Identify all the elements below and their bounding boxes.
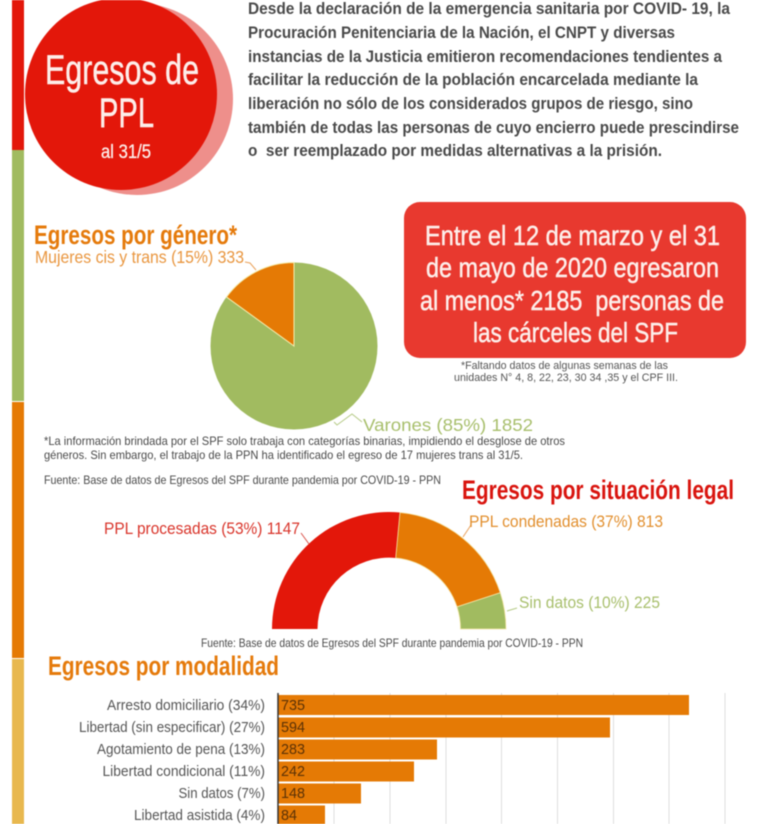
callout footnote: *Faltando datos de algunas semanas de las bbox=[461, 360, 668, 372]
bar chart: modalidad: Sin datos (7%) bbox=[178, 786, 265, 802]
bar chart: modalidad: 283 bbox=[281, 741, 305, 758]
bar chart: modalidad: 735 bbox=[281, 697, 305, 714]
intro paragraph: facilitar la reducción de la población encarcelada mediante la bbox=[248, 71, 699, 89]
semi-donut chart: situación legal: Sin datos (10%) 225 bbox=[519, 593, 660, 612]
left colour stripe bbox=[12, 0, 24, 824]
bar chart: modalidad bbox=[79, 693, 725, 824]
intro paragraph: instancias de la Justicia emitieron recomendaciones tendientes a bbox=[248, 48, 723, 66]
intro paragraph: o ser reemplazado por medidas alternativas a la prisión. bbox=[248, 142, 662, 160]
semi-donut chart: situación legal: PPL procesadas (53%) 1147 bbox=[104, 519, 300, 538]
gender footnote: géneros. Sin embargo, el trabajo de la PPN ha identificado el egreso de 17 mujeres trans al 31/5. bbox=[44, 448, 523, 462]
title badge: al 31/5 bbox=[101, 142, 151, 163]
callout: total de egresos bbox=[404, 202, 746, 358]
bar chart: modalidad: 84 bbox=[281, 807, 297, 824]
heading: egresos por género: Egresos por género* bbox=[34, 220, 237, 250]
bar chart: modalidad: Agotamiento de pena (13%) bbox=[97, 742, 265, 758]
title badge: PPL bbox=[99, 89, 154, 136]
gender footnote: *La información brindada por el SPF solo trabaja con categorías binarias, impidiendo el desglose de otros bbox=[44, 434, 565, 448]
intro paragraph: Procuración Penitenciaria de la Nación, el CNPT y diversas bbox=[248, 24, 675, 42]
callout: total de egresos: Entre el 12 de marzo y el 31 bbox=[425, 220, 720, 251]
bar chart: modalidad: 594 bbox=[281, 719, 305, 736]
callout footnote bbox=[454, 360, 678, 384]
pie chart: género: Varones (85%) 1852 bbox=[363, 415, 533, 435]
callout: total de egresos: las cárceles del SPF bbox=[473, 317, 678, 348]
bar chart: modalidad: Libertad condicional (11%) bbox=[102, 764, 265, 780]
intro paragraph bbox=[248, 0, 739, 160]
pie chart: género: Mujeres cis y trans (15%) 333 bbox=[35, 247, 244, 267]
title badge: Egresos de bbox=[45, 46, 199, 93]
title badge bbox=[25, 0, 233, 195]
bar chart: modalidad: Libertad (sin especificar) (27%) bbox=[79, 720, 265, 736]
bar chart: modalidad: Arresto domiciliario (34%) bbox=[107, 698, 265, 714]
heading: egresos por modalidad: Egresos por modalidad bbox=[48, 651, 279, 681]
intro paragraph: liberación no sólo de los considerados grupos de riesgo, sino bbox=[248, 95, 693, 113]
gender footnote bbox=[44, 434, 565, 487]
semi-donut chart: situación legal: PPL condenadas (37%) 813 bbox=[469, 512, 663, 531]
callout footnote: unidades N° 4, 8, 22, 23, 30 34 ,35 y el CPF III. bbox=[454, 372, 678, 384]
bar chart: modalidad: 148 bbox=[281, 785, 305, 802]
intro paragraph: Desde la declaración de la emergencia sanitaria por COVID- 19, la bbox=[248, 0, 731, 18]
semi-donut chart: situación legal bbox=[104, 512, 663, 629]
pie chart: género bbox=[35, 247, 533, 435]
bar chart: modalidad: 242 bbox=[281, 763, 305, 780]
bar chart: modalidad: Libertad asistida (4%) bbox=[134, 808, 265, 824]
gender footnote: Fuente: Base de datos de Egresos del SPF durante pandemia por COVID-19 - PPN bbox=[44, 473, 441, 487]
source note: situación legal: Fuente: Base de datos de Egresos del SPF durante pandemia por COVID-19 - PPN bbox=[201, 636, 583, 650]
